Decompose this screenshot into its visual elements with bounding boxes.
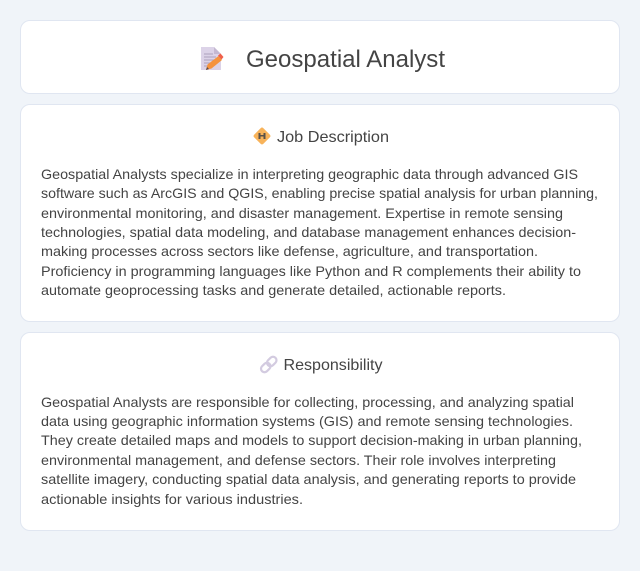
job description text: Geospatial Analysts specialize in interpreting geographic data through advanced GIS bbox=[41, 166, 578, 182]
job description text: environmental monitoring, and disaster management. Expertise in remote sensing bbox=[41, 205, 563, 221]
responsibility text: environmental management, and defense sectors. Their role involves interpreting bbox=[41, 452, 556, 468]
responsibility text: data using geographic information systems (GIS) and remote sensing technologies. bbox=[41, 413, 573, 429]
panel: responsibility bbox=[20, 332, 620, 531]
responsibility text: Geospatial Analysts are responsible for collecting, processing, and analyzing spatial bbox=[41, 394, 574, 410]
job description text: technologies, spatial data modeling, and database management enhances decision- bbox=[41, 224, 576, 240]
heading: responsibility: Responsibility bbox=[284, 357, 382, 374]
panel: title card bbox=[20, 20, 620, 94]
heading: job description: Job Description bbox=[277, 129, 389, 146]
job description text: software such as ArcGIS and QGIS, enabling precise spatial analysis for urban planning, bbox=[41, 185, 598, 201]
job description text: making processes across sectors like defense, agriculture, and transportation. bbox=[41, 243, 538, 259]
responsibility text: They create detailed maps and models to support decision-making in urban planning, bbox=[41, 432, 582, 448]
responsibility text: actionable insights for various industries. bbox=[41, 491, 303, 507]
panel: job description bbox=[20, 104, 620, 322]
job description text: Proficiency in programming languages like Python and R complements their ability to bbox=[41, 263, 581, 279]
job description text: automate geoprocessing tasks and generate detailed, actionable reports. bbox=[41, 282, 506, 298]
title heading: Geospatial Analyst bbox=[246, 46, 445, 73]
responsibility text: satellite imagery, conducting spatial data analysis, and generating reports to provide bbox=[41, 471, 576, 487]
